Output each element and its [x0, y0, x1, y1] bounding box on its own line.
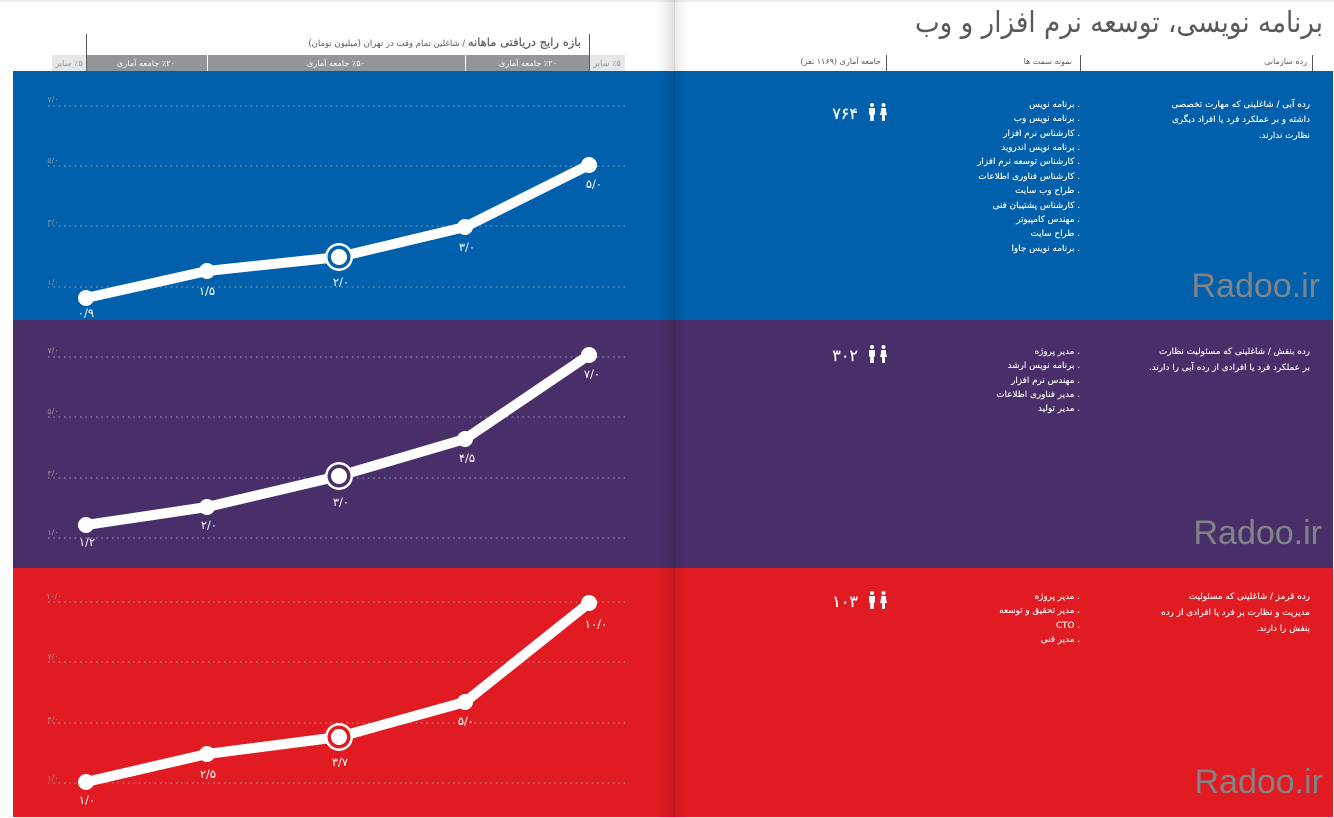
panel: red level	[13, 568, 1333, 817]
population count: 302: ۳۰۲	[832, 346, 858, 365]
level description: purple: بر عملکرد فرد یا افرادی از رده آبی را دارند.	[1149, 361, 1310, 373]
salary line chart: blue	[47, 95, 625, 320]
population count: 103	[832, 591, 887, 611]
table column headers: نمونه سمت ها	[1024, 57, 1072, 66]
level description: red	[1161, 592, 1310, 634]
level description: blue: نظارت ندارند.	[1259, 131, 1310, 141]
sample positions: blue: . برنامه نویس وب	[1014, 114, 1080, 124]
salary line chart: purple: ۷/۰	[47, 346, 59, 355]
sample positions: blue	[976, 100, 1080, 254]
population count: 764: ۷۶۴	[832, 104, 858, 123]
level description: purple	[1149, 347, 1310, 373]
level description: red: مدیریت و نظارت بر فرد یا افرادی از رده	[1161, 608, 1310, 618]
salary line chart: red	[46, 592, 625, 807]
sample positions: blue: . طراح سایت	[1030, 229, 1080, 239]
sample positions: blue: . کارشناس فناوری اطلاعات	[978, 172, 1080, 182]
salary line chart: purple: ۳/۰	[333, 495, 349, 509]
salary line chart: purple: ۴/۵	[459, 451, 475, 465]
sample positions: red: . مدیر پروژه	[1035, 592, 1080, 602]
salary line chart: purple: ۳/۰	[47, 469, 59, 478]
sample positions: blue: . کارشناس توسعه نرم افزار	[976, 157, 1080, 167]
level description: blue	[1171, 98, 1310, 141]
percentile band bar: ٪۵ سایر	[54, 58, 83, 68]
sample positions: blue: . برنامه نویس جاوا	[1011, 244, 1080, 254]
population count: 103: ۱۰۳	[832, 592, 858, 611]
level description: red: رده قرمز / شاغلینی که مسئولیت	[1189, 592, 1310, 602]
salary line chart: purple: ۲/۰	[201, 518, 217, 532]
salary line chart: blue: ۱/۵	[199, 284, 215, 298]
sample positions: blue: . برنامه نویس اندروید	[1001, 143, 1080, 153]
salary line chart: red: ۱۰/۰	[46, 592, 62, 601]
salary line chart: red: ۵/۰	[458, 714, 474, 728]
watermark: Radoo.ir	[1193, 514, 1322, 552]
population count: 764	[832, 103, 887, 123]
salary line chart: blue: ۲/۰	[333, 275, 349, 289]
sample positions: purple: . برنامه نویس ارشد	[1008, 361, 1080, 371]
sample positions: purple: . مهندس نرم افزار	[1010, 376, 1080, 386]
level description: blue: رده آبی / شاغلینی که مهارت تخصصی	[1171, 98, 1310, 110]
salary line chart: purple: ۱/۲	[79, 535, 95, 549]
sample positions: purple: . مدیر تولید	[1038, 404, 1080, 414]
level description: purple: رده بنفش / شاغلینی که مسئولیت نظارت	[1159, 347, 1310, 357]
salary line chart: blue: ۱/۰	[47, 278, 59, 287]
percentile band bar	[52, 55, 625, 71]
table column headers: رده سازمانی	[1264, 57, 1307, 66]
salary line chart: blue: ۳/۰	[459, 240, 475, 254]
salary line chart: red: ۲/۵	[200, 767, 216, 781]
sample positions: blue: . کارشناس نرم افزار	[1002, 129, 1080, 139]
panel: blue level	[13, 71, 1333, 320]
sample positions: blue: . برنامه نویس	[1029, 100, 1080, 110]
percentile band bar: ٪۲۰ جامعه آماری	[499, 58, 557, 68]
chart header: monthly salary range	[52, 34, 625, 71]
sample positions: red	[999, 592, 1080, 645]
sample positions: red: . CTO	[1056, 621, 1080, 631]
salary line chart: purple: ۷/۰	[584, 367, 600, 381]
salary line chart: red: ۴/۰	[47, 715, 59, 724]
percentile band bar: ٪۵ سایر	[592, 58, 621, 68]
salary line chart: purple	[47, 346, 625, 549]
sample positions: blue: . کارشناس پشتیبان فنی	[993, 201, 1080, 211]
watermark: Radoo.ir	[1191, 267, 1320, 305]
salary line chart: purple: ۱/۰	[47, 528, 59, 537]
table column headers: جامعه آماری (۱۱۶۹ نفر)	[800, 56, 881, 66]
level description: red: بنفش را دارند.	[1256, 624, 1310, 634]
sample positions: purple: . مدیر پروژه	[1035, 347, 1080, 357]
population count: 302	[832, 345, 887, 365]
level description: blue: داشته و بر عملکرد فرد یا افراد دیگری	[1172, 114, 1310, 125]
sample positions: blue: . طراح وب سایت	[1015, 186, 1080, 196]
salary line chart: red: ۱/۰	[47, 774, 59, 783]
sample positions: purple	[996, 347, 1080, 414]
salary line chart: blue: ۷/۰	[47, 95, 59, 104]
salary line chart: red: ۷/۰	[47, 652, 59, 661]
salary line chart: red: ۱/۰	[79, 793, 95, 807]
salary line chart: purple: ۵/۰	[47, 407, 59, 416]
percentile band bar: ٪۵۰ جامعه آماری	[307, 58, 365, 68]
sample positions: red: . مدیر تحقیق و توسعه	[999, 606, 1080, 616]
salary line chart: blue: ۵/۰	[47, 156, 59, 165]
salary line chart: blue: ۰/۹	[78, 306, 94, 320]
sample positions: red: . مدیر فنی	[1041, 635, 1080, 645]
sample positions: blue: . مهندس کامپیوتر	[1015, 215, 1080, 225]
percentile band bar: ٪۲۰ جامعه آماری	[117, 58, 175, 68]
sample positions: purple: . مدیر فناوری اطلاعات	[996, 390, 1080, 400]
salary line chart: red: ۳/۷	[332, 755, 348, 769]
salary line chart: blue: ۵/۰	[586, 177, 602, 191]
panel: purple level	[13, 320, 1333, 568]
table column headers	[800, 55, 1313, 71]
watermark: Radoo.ir	[1194, 763, 1323, 801]
salary line chart: red: ۱۰/۰	[585, 617, 607, 631]
salary line chart: blue: ۳/۰	[47, 218, 59, 227]
chart heading: بازه رایج دریافتی ماهانه / شاغلین تمام وقت در تهران (میلیون تومان)	[308, 35, 581, 50]
